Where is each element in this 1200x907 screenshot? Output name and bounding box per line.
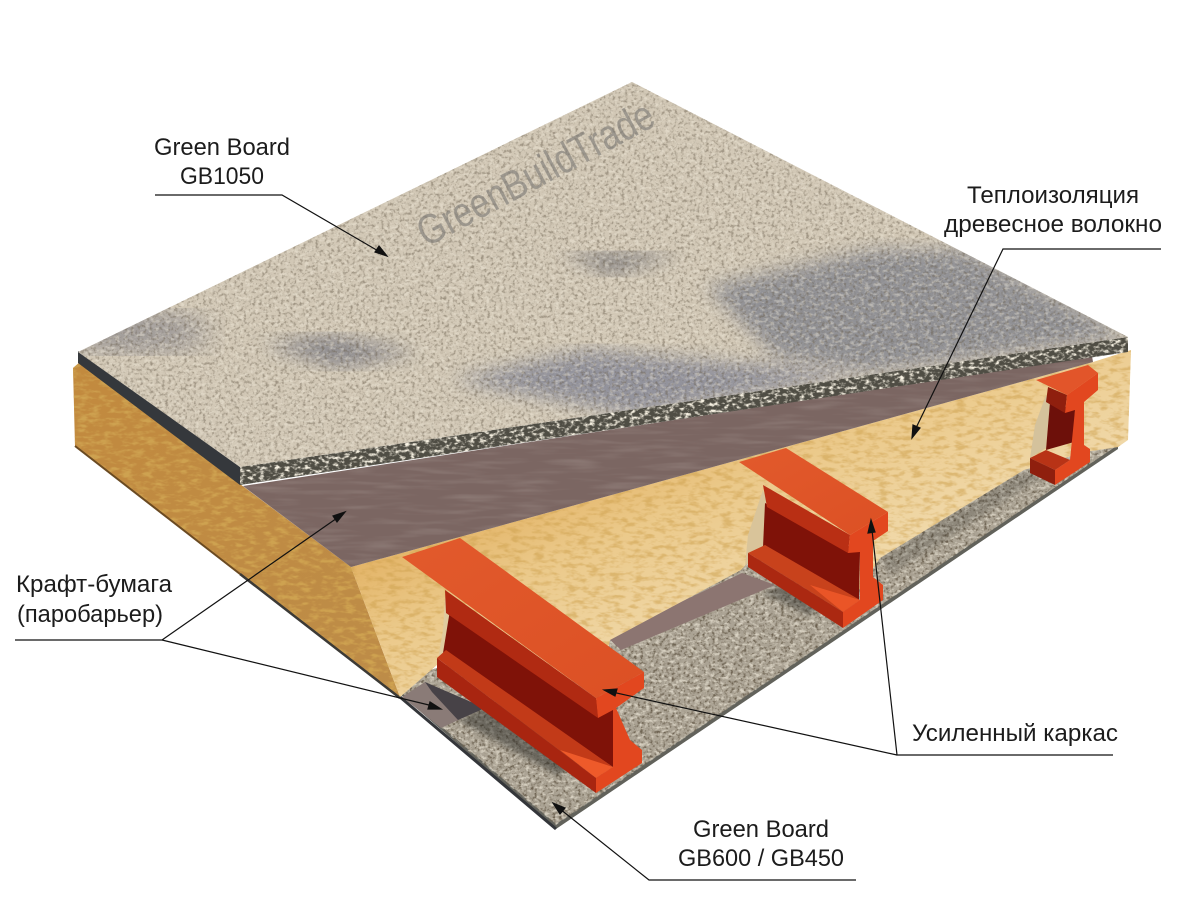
panel: layered floor cutaway bbox=[60, 80, 1140, 830]
arrow: GB1050 leader bbox=[155, 195, 387, 256]
insulation left side face bbox=[73, 363, 400, 699]
insulation front face between joists bbox=[340, 345, 1140, 705]
label: Green Board GB600 / GB450 bbox=[678, 816, 844, 872]
joist 3 bbox=[1030, 365, 1098, 485]
label: thermal insulation: Теплоизоляция bbox=[967, 182, 1139, 209]
label: kraft paper bbox=[16, 571, 173, 628]
watermark: GreenBuildTrade bbox=[408, 91, 662, 255]
kraft paper bbox=[240, 350, 1100, 570]
board top face bbox=[60, 80, 1130, 470]
label: Green Board GB600 / GB450: Green Board bbox=[693, 816, 829, 843]
label: Green Board GB1050: GB1050 bbox=[180, 163, 264, 190]
joist 2 bbox=[739, 448, 888, 628]
arrow: frame leaders bbox=[604, 520, 1113, 755]
arrow: kraft paper leaders bbox=[15, 512, 441, 709]
top board GB1050 bbox=[60, 80, 1130, 488]
arrow: GB600 leader bbox=[553, 803, 856, 880]
label: reinforced frame: Усиленный каркас bbox=[912, 720, 1118, 747]
label: Green Board GB1050 bbox=[154, 134, 290, 190]
label: thermal insulation bbox=[944, 182, 1162, 238]
bottom board GB600 / GB450 bbox=[400, 430, 1120, 830]
label: Green Board GB1050: Green Board bbox=[154, 134, 290, 161]
kraft paper visible at floor bbox=[402, 573, 775, 728]
label: kraft paper: Крафт-бумага bbox=[16, 571, 173, 598]
label: kraft paper: (паробарьер) bbox=[17, 601, 163, 628]
board front edge bbox=[238, 330, 1130, 488]
board left edge bbox=[78, 351, 240, 485]
label: thermal insulation: древесное волокно bbox=[944, 211, 1162, 238]
joist 1 bbox=[402, 538, 644, 793]
label: Green Board GB600 / GB450: GB600 / GB450 bbox=[678, 845, 844, 872]
arrow: insulation leader bbox=[912, 249, 1161, 438]
